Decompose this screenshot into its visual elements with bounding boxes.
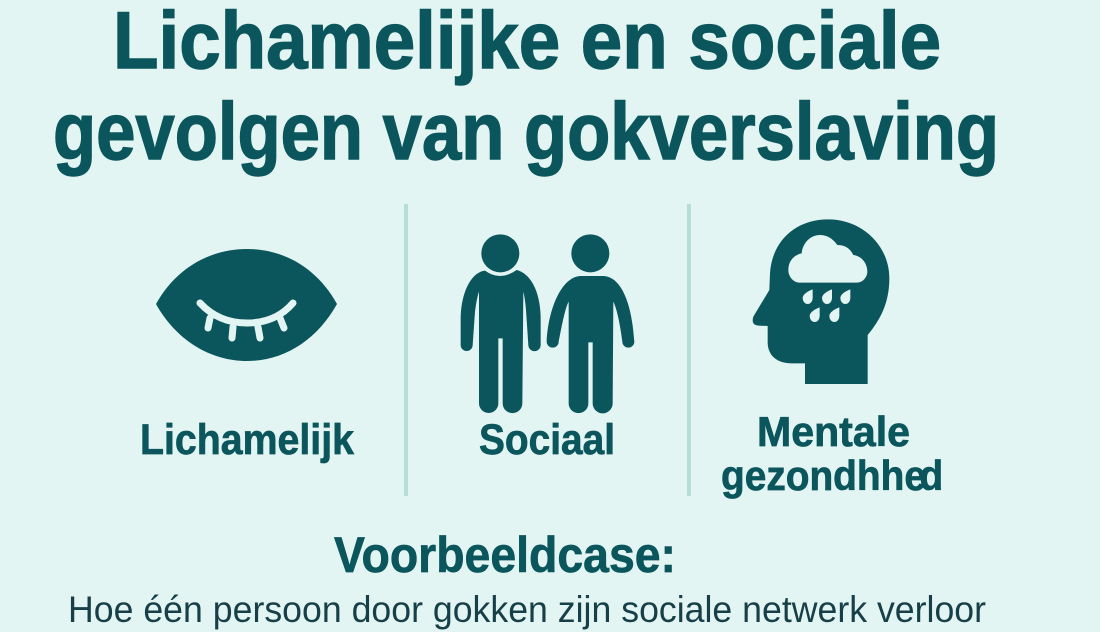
label: Sociaal: Sociaal <box>479 416 615 464</box>
label: Mentale gezondhhed: Mentale <box>757 408 910 455</box>
title <box>53 0 999 177</box>
label: Mentale gezondhhed <box>721 408 943 499</box>
label: Lichamelijk: Lichamelijk <box>140 416 354 464</box>
text: case description: Hoe één persoon door gokken zijn sociale netwerk verloor <box>68 589 986 630</box>
heading: Voorbeeldcase: Voorbeeldcase: <box>334 527 676 583</box>
label: Mentale gezondhhed: gezondhhed <box>721 452 943 499</box>
icon: closed eye <box>156 249 337 361</box>
icon: two people <box>461 234 634 413</box>
icon: head with rain cloud <box>753 219 889 384</box>
